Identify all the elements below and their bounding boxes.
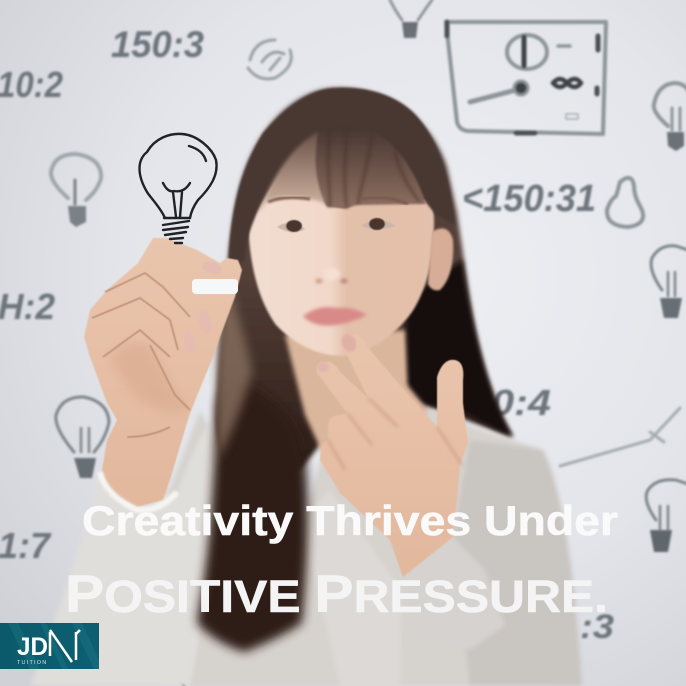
hand: right hand with raised fingers <box>317 332 468 577</box>
icon: hand-drawn light bulb <box>140 134 217 243</box>
icon: left upper bulb <box>51 154 101 227</box>
ear <box>428 228 453 290</box>
hair: crown and fringe <box>228 88 455 270</box>
icon: pear shaped lock <box>607 178 643 227</box>
shirt: placket line <box>331 570 333 686</box>
handwritten ratio text: 150:3 <box>111 24 204 65</box>
handwritten ratio text: <150:31 <box>462 178 596 220</box>
title line one: Creativity Thrives Under <box>82 497 618 544</box>
neck <box>285 330 428 470</box>
marker: white pen <box>192 279 238 294</box>
title line two: POSITIVE PRESSURE. <box>65 565 608 624</box>
face: eyes <box>277 218 396 232</box>
sketch: bottom glyph <box>176 666 192 686</box>
logo: JDN Tuition badge: JD <box>17 633 48 661</box>
face: eyebrows <box>268 197 408 204</box>
icon: whiteboard sketch <box>446 22 606 134</box>
hair: strands over shirt <box>197 380 308 652</box>
face: nose <box>316 268 348 283</box>
shirt: body and sleeves <box>30 405 582 686</box>
handwritten ratio text: 0:4 <box>491 382 551 423</box>
icon: right lower bulb <box>646 480 686 552</box>
icon: swirl sketch <box>248 40 291 79</box>
handwritten ratio text: :3 <box>580 608 614 646</box>
face <box>248 125 434 356</box>
icon: right middle bulb <box>651 246 686 318</box>
icon: right upper bulb <box>654 83 686 151</box>
cuff: left sleeve edge <box>100 472 177 510</box>
icon: top bulb <box>390 0 432 38</box>
hair: strand lines <box>328 130 420 208</box>
hair: left fringe over forehead <box>258 132 328 214</box>
hair: dark right side behind neck <box>405 260 513 437</box>
hand: nails <box>183 260 223 353</box>
hair: long hair behind <box>214 88 513 470</box>
logo: JDN Tuition badge: TUITION <box>17 660 47 666</box>
sketch: connector line right <box>560 408 680 466</box>
logo: JDN Tuition badge <box>0 623 99 669</box>
hand: left hand holding marker <box>84 238 242 510</box>
hair: centre fringe <box>316 125 426 208</box>
face: lips <box>303 307 367 326</box>
person: blurred portrait <box>30 88 582 686</box>
icon: left lower bulb <box>56 397 109 478</box>
hair: lighter side strands <box>216 290 252 460</box>
